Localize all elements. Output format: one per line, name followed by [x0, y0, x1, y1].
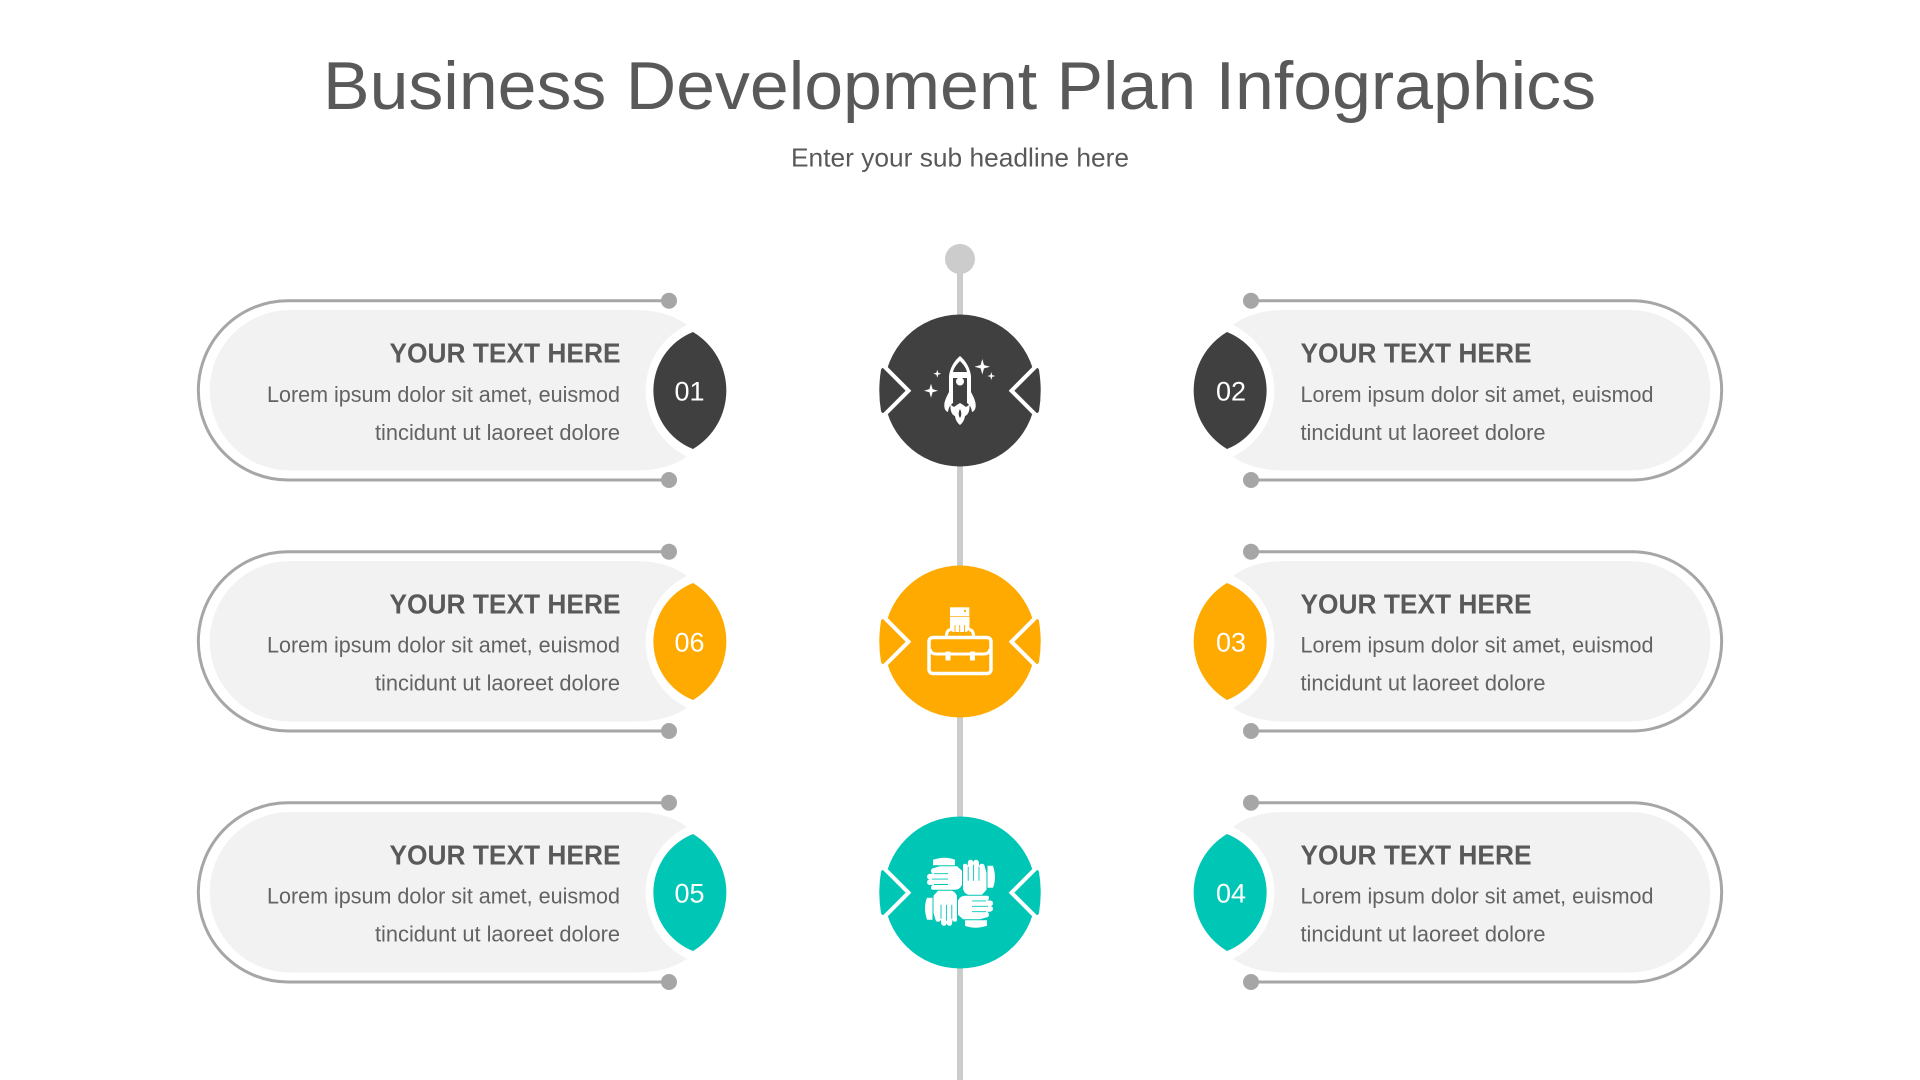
panel: step 02: 02 [1216, 377, 1246, 407]
node 2: briefcase [879, 566, 1041, 718]
panel: step 04: YOUR TEXT HERE [1300, 840, 1532, 871]
panel: step 01: YOUR TEXT HERE [390, 338, 620, 369]
panel: step 04 [1194, 795, 1722, 990]
icon: four hands [925, 858, 995, 928]
panel: step 01: Lorem ipsum dolor sit amet, euismod [267, 382, 620, 407]
central timeline [945, 244, 975, 1080]
panel: step 03: 03 [1216, 628, 1246, 658]
panel: step 03: YOUR TEXT HERE [1300, 589, 1532, 620]
panel: step 01: tincidunt ut laoreet dolore [375, 420, 620, 445]
panel: step 05: tincidunt ut laoreet dolore [375, 922, 620, 946]
panel: step 04: 04 [1216, 879, 1246, 909]
panel: step 06: 06 [674, 628, 705, 658]
panel: step 01 [198, 293, 726, 488]
panel: step 01: 01 [674, 377, 705, 407]
panel: step 03 [1194, 544, 1722, 739]
panel: step 06 [198, 544, 726, 739]
panel: step 05: YOUR TEXT HERE [390, 840, 620, 871]
panel: step 04: tincidunt ut laoreet dolore [1300, 922, 1546, 946]
node 1: rocket [879, 314, 1041, 466]
panel: step 06: Lorem ipsum dolor sit amet, euismod [267, 632, 620, 658]
panel: step 05 [198, 795, 726, 990]
title: Business Development Plan Infographics [323, 48, 1596, 124]
node 3: teamwork hands [879, 816, 1041, 968]
panel: step 06: tincidunt ut laoreet dolore [375, 670, 620, 696]
panel: step 05: 05 [674, 879, 705, 909]
panel: step 05: Lorem ipsum dolor sit amet, euismod [267, 884, 620, 908]
icon: briefcase held by hand [929, 607, 991, 674]
panel: step 02: Lorem ipsum dolor sit amet, euismod [1300, 382, 1654, 407]
icon: rocket [924, 356, 995, 425]
panel: step 03: tincidunt ut laoreet dolore [1300, 670, 1546, 696]
panel: step 03: Lorem ipsum dolor sit amet, euismod [1300, 632, 1654, 658]
panel: step 02 [1194, 293, 1722, 488]
panel: step 04: Lorem ipsum dolor sit amet, euismod [1300, 884, 1654, 908]
panel: step 06: YOUR TEXT HERE [390, 589, 620, 620]
panel: step 02: tincidunt ut laoreet dolore [1300, 420, 1546, 445]
panel: step 02: YOUR TEXT HERE [1300, 338, 1532, 369]
subtitle: Enter your sub headline here [791, 142, 1129, 172]
